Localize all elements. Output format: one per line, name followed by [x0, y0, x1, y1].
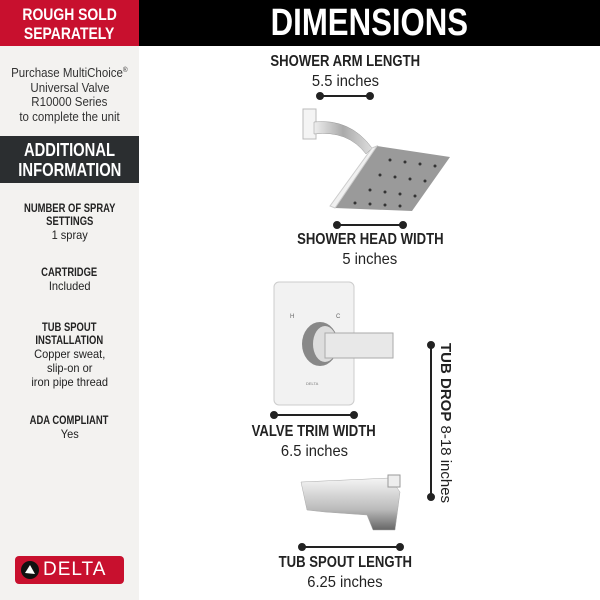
text: tub spout installation: Copper sweat,: [34, 347, 105, 361]
label: shower arm length: SHOWER ARM LENGTH: [270, 53, 420, 70]
icon: valve trim: C: [336, 314, 341, 320]
text: spray settings: [24, 203, 116, 242]
text: spray settings: 1 spray: [51, 228, 88, 242]
label: shower head width: [297, 231, 443, 268]
text: ada compliant: Yes: [60, 427, 78, 441]
label: tub spout length: [278, 554, 412, 591]
text: spray settings: SETTINGS: [46, 216, 93, 228]
text: purchase valve: R10000 Series: [31, 95, 108, 109]
text: cartridge: Included: [49, 279, 90, 293]
icon: valve trim: DELTA: [306, 381, 319, 386]
label: shower head width: 5 inches: [343, 251, 397, 268]
icon: shower head: [302, 108, 450, 211]
text: purchase valve: Universal Valve: [30, 81, 109, 95]
label: valve trim width: 6.5 inches: [280, 443, 348, 460]
label: tub spout length: TUB SPOUT LENGTH: [278, 554, 412, 571]
label: valve trim width: VALVE TRIM WIDTH: [252, 423, 376, 440]
text: tub spout installation: [31, 322, 108, 389]
logo: delta: [15, 556, 124, 584]
text: ada compliant: ADA COMPLIANT: [30, 415, 109, 427]
label: valve trim width: [252, 423, 376, 460]
heading: rough sold separately: ROUGH SOLD: [22, 5, 117, 24]
icon: tub spout: [300, 474, 400, 530]
label: tub spout length: 6.25 inches: [307, 574, 383, 591]
text: tub spout installation: INSTALLATION: [36, 335, 103, 347]
heading: dimensions: DIMENSIONS: [271, 2, 468, 44]
panel: sidebar: [0, 0, 139, 600]
text: purchase valve: Purchase MultiChoice®: [11, 66, 128, 80]
text: spray settings: NUMBER OF SPRAY: [24, 203, 115, 215]
icon: valve trim: [274, 282, 394, 406]
label: shower arm length: 5.5 inches: [311, 73, 379, 90]
heading: additional information: INFORMATION: [18, 160, 121, 180]
icon: valve trim: H: [290, 314, 294, 320]
heading: additional information: [0, 136, 139, 183]
heading: rough sold separately: [0, 0, 139, 46]
heading: dimensions: [139, 0, 600, 46]
text: purchase valve: to complete the unit: [19, 110, 120, 124]
text: tub spout installation: slip-on or: [47, 361, 92, 375]
label: shower arm length: [270, 53, 420, 90]
text: purchase valve: [11, 66, 128, 124]
label: shower head width: SHOWER HEAD WIDTH: [297, 231, 443, 248]
text: tub spout installation: iron pipe thread: [31, 375, 108, 389]
logo: delta: DELTA: [43, 559, 106, 580]
heading: rough sold separately: SEPARATELY: [24, 24, 115, 43]
label: tub drop: TUB DROP 8-18 inches: [437, 343, 454, 503]
text: ada compliant: [30, 415, 109, 441]
text: tub spout installation: TUB SPOUT: [42, 322, 97, 334]
heading: additional information: ADDITIONAL: [24, 140, 115, 160]
text: cartridge: [41, 267, 98, 293]
text: cartridge: CARTRIDGE: [41, 267, 98, 279]
